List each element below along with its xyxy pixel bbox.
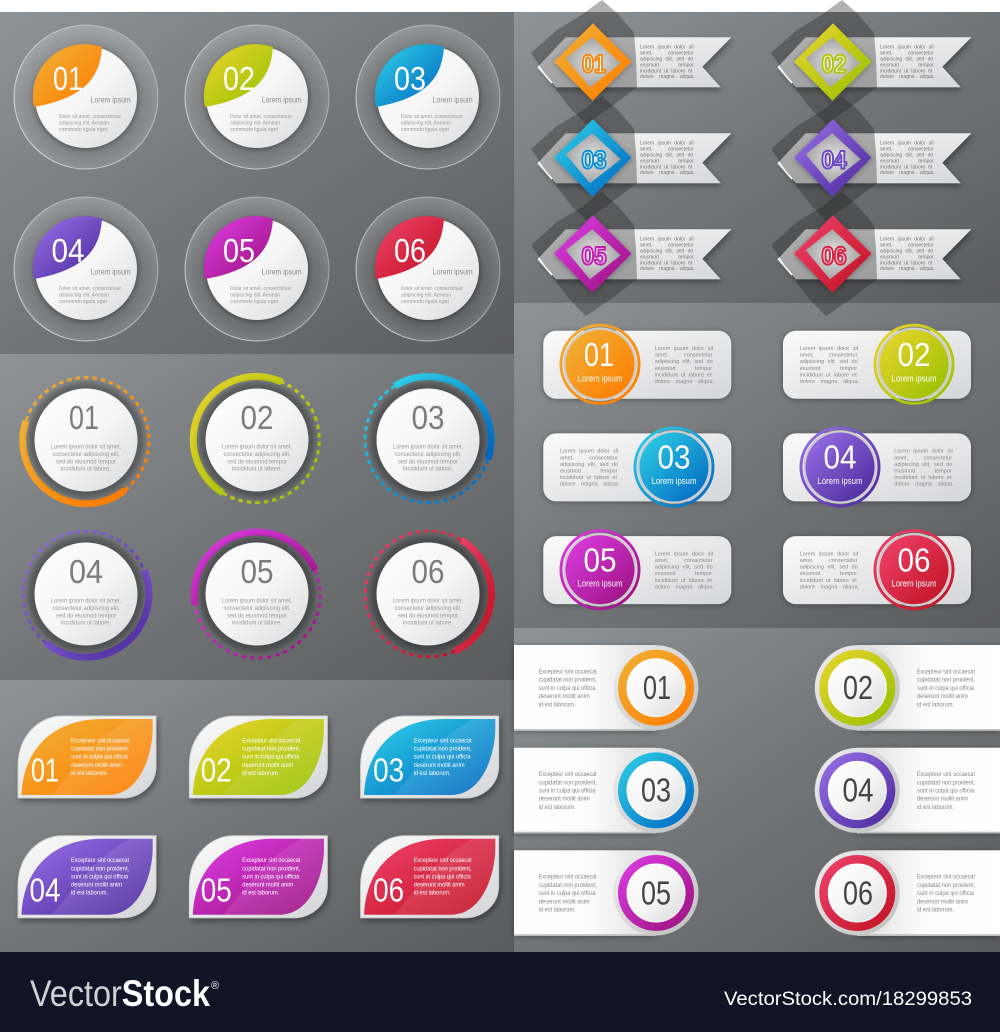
strip 03: cupidatat non proident,: [539, 779, 597, 786]
ribbon 06: dolore magna aliqua.: [880, 266, 935, 272]
panel: diamond ribbons: [514, 0, 1000, 316]
card 02: Lorem ipsum: [262, 95, 302, 105]
ribbon 04: adipiscing elit, sed do: [880, 152, 933, 158]
badge 04: 04: [30, 871, 60, 908]
footer bar: [0, 952, 1000, 1032]
strip 06: 06: [843, 874, 873, 911]
card 03: Dolor sit amet, consectetuer: [401, 114, 463, 120]
box 03: dolore magna aliqua.: [560, 482, 620, 488]
badge 03: Excepteur sint occaecat: [414, 737, 472, 744]
card 02: commodo ligula eget: [230, 127, 278, 133]
box 06: Lorem ipsum dolor sit: [800, 551, 859, 557]
ribbon 03: adipiscing elit, sed do: [640, 152, 693, 158]
card 05: adipiscing elit. Aenean: [230, 293, 280, 299]
card 05: Lorem ipsum: [262, 267, 302, 277]
card 06: [356, 197, 500, 341]
card 03: [356, 25, 500, 169]
strip 01: id est laborum.: [539, 701, 576, 708]
ribbon 04: dolore magna aliqua.: [880, 170, 935, 176]
badge 04: cupidatat non proident,: [71, 865, 129, 872]
strip 02: 02: [843, 669, 873, 706]
box 06: eiusmod tempor: [800, 571, 857, 577]
ring card 05: Lorem ipsum dolor sit amet,: [222, 598, 292, 605]
badge 03: [361, 716, 499, 798]
ribbon 01: eiusmod tempor: [640, 62, 694, 68]
card 01: 01: [53, 60, 83, 97]
card 02: 02: [223, 60, 255, 97]
ribbon 01: amet, consectetur: [640, 51, 694, 57]
ribbon 04: 04: [822, 146, 847, 174]
box 02: incididunt ut labore et: [800, 372, 857, 378]
card 02: [185, 25, 329, 169]
badge 06: deserunt mollit anim: [414, 881, 465, 888]
ring card 02: 02: [240, 399, 274, 436]
strip 02: deserunt mollit anim: [917, 693, 968, 700]
panel: white strips with rings: [514, 628, 1000, 952]
panel: ring circles: [0, 354, 514, 680]
box 06: [783, 531, 971, 609]
strip 06: Excepteur sint occaecat: [917, 874, 975, 881]
card 05: Dolor sit amet, consectetuer: [230, 286, 292, 292]
strip 01: deserunt mollit anim: [539, 693, 590, 700]
box 04: incididunt ut labore et: [894, 475, 952, 481]
ribbon 05: incididunt ut labore et: [640, 260, 693, 266]
ring card 04: incididunt ut labore.: [61, 620, 111, 627]
box 05: Lorem ipsum dolor sit: [655, 551, 714, 557]
strip 06: deserunt mollit anim: [917, 898, 968, 905]
box 03: amet, consectetur: [560, 455, 618, 461]
ring card 01: consectetur adipiscing elit,: [52, 451, 120, 458]
panel: leaf badges: [0, 680, 514, 952]
ribbon 02: incididunt ut labore et: [880, 68, 933, 74]
panel: rounded boxes with circles: [514, 303, 1000, 628]
box 06: dolore magna aliqua.: [800, 584, 860, 590]
box 02: 02: [898, 336, 930, 373]
strip 04: Excepteur sint occaecat: [917, 771, 975, 778]
box 02: dolore magna aliqua.: [800, 379, 860, 385]
ring card 06: incididunt ut labore.: [403, 620, 453, 627]
badge 05: deserunt mollit anim: [242, 881, 294, 888]
box 01: adipiscing elit, sed do: [655, 359, 713, 365]
ring card 05: 05: [240, 553, 274, 590]
badge 02: [189, 716, 327, 798]
ribbon 02: adipiscing elit, sed do: [880, 56, 933, 62]
badge 06: [361, 836, 499, 918]
strip 05: sunt in culpa qui officia: [539, 890, 596, 897]
ribbon 01: [531, 0, 731, 124]
box 04: 04: [824, 439, 856, 476]
card 01: [14, 25, 158, 169]
box 04: Lorem ipsum: [818, 476, 863, 487]
strip 03: sunt in culpa qui officia: [539, 788, 596, 795]
ring card 02: incididunt ut labore.: [232, 466, 282, 473]
box 03: incididunt ut labore et: [560, 475, 618, 481]
badge 04: Excepteur sint occaecat: [71, 857, 129, 864]
badge 06: Excepteur sint occaecat: [414, 857, 472, 864]
ring card 02: consectetur adipiscing elit,: [224, 451, 291, 458]
badge 02: sunt in culpa qui officia: [242, 754, 300, 761]
badge 06: cupidatat non proident,: [414, 865, 472, 872]
strip 05: Excepteur sint occaecat: [539, 874, 597, 881]
badge 03: 03: [373, 752, 404, 789]
strip 01: sunt in culpa qui officia: [539, 685, 596, 692]
card 04: commodo ligula eget: [59, 299, 107, 305]
strip 03: [514, 748, 698, 833]
ribbon 06: adipiscing elit, sed do: [880, 248, 933, 254]
box 02: eiusmod tempor: [800, 366, 857, 372]
box 01: dolore magna aliqua.: [655, 379, 715, 385]
badge 02: cupidatat non proident,: [242, 746, 300, 753]
ring card 04: sed do eiusmod tempor: [56, 612, 116, 620]
ring card 06: Lorem ipsum dolor sit amet,: [393, 598, 463, 605]
box 01: amet, consectetur: [655, 353, 713, 359]
box 01: [543, 325, 731, 403]
strip 02: cupidatat non proident,: [917, 677, 975, 684]
ribbon 04: incididunt ut labore et: [880, 164, 933, 170]
box 05: eiusmod tempor: [655, 571, 712, 577]
badge 01: cupidatat non proident,: [71, 746, 129, 753]
ribbon 03: 03: [582, 146, 606, 174]
footer logo: VectorStock: [30, 973, 210, 1014]
badge 01: Excepteur sint occaecat: [71, 737, 129, 744]
ring card 01: 01: [69, 399, 99, 436]
strip 01: [514, 645, 698, 731]
ribbon 02: amet, consectetur: [880, 51, 934, 57]
box 01: incididunt ut labore et: [655, 372, 712, 378]
registered mark: ®: [211, 980, 219, 992]
ribbon 04: Lorem ipsum dolor sit: [880, 141, 934, 147]
strip 05: cupidatat non proident,: [539, 882, 597, 889]
ring card 02: Lorem ipsum dolor sit amet,: [222, 444, 292, 451]
card 04: [14, 197, 158, 341]
ring card 01: Lorem ipsum dolor sit amet,: [51, 444, 121, 451]
ribbon 02: Lorem ipsum dolor sit: [880, 45, 934, 51]
box 05: Lorem ipsum: [578, 579, 623, 590]
ribbon 06: 06: [822, 242, 846, 270]
card 05: [185, 197, 329, 341]
badge 04: deserunt mollit anim: [71, 881, 122, 888]
box 05: incididunt ut labore et: [655, 578, 712, 584]
card 06: adipiscing elit. Aenean: [401, 293, 451, 299]
badge 02: id est laborum.: [242, 770, 279, 777]
badge 03: cupidatat non proident,: [414, 746, 472, 753]
strip 06: id est laborum.: [917, 907, 954, 914]
strip 03: 03: [641, 772, 671, 809]
card 06: commodo ligula eget: [401, 299, 449, 305]
strip 05: deserunt mollit anim: [539, 898, 590, 905]
ring card 01: sed do eiusmod tempor: [56, 458, 116, 466]
box 04: eiusmod tempor: [894, 468, 952, 474]
ring card 03: consectetur adipiscing elit,: [394, 451, 462, 458]
ring card 03: sed do eiusmod tempor: [398, 458, 458, 466]
card 01: adipiscing elit. Aenean: [59, 121, 109, 127]
ribbon 02: [771, 0, 971, 124]
ribbon 01: 01: [582, 50, 606, 78]
ribbon 03: incididunt ut labore et: [640, 164, 693, 170]
ring card 04: [23, 531, 149, 657]
box 04: dolore magna aliqua.: [894, 482, 954, 488]
ribbon 02: eiusmod tempor: [880, 62, 934, 68]
badge 04: sunt in culpa qui officia: [71, 873, 128, 880]
card 05: commodo ligula eget: [230, 299, 278, 305]
box 03: eiusmod tempor: [560, 468, 618, 474]
card 06: 06: [394, 232, 426, 269]
box 01: Lorem ipsum dolor sit: [655, 346, 714, 352]
ring card 06: consectetur adipiscing elit,: [394, 605, 462, 612]
card 04: Dolor sit amet, consectetuer: [59, 286, 121, 292]
strip 04: 04: [842, 772, 874, 809]
ring card 02: [193, 377, 319, 503]
ribbon 04: amet, consectetur: [880, 147, 934, 153]
ribbon 06: [771, 192, 971, 316]
badge 03: sunt in culpa qui officia: [414, 754, 471, 761]
ring card 05: [194, 532, 320, 658]
badge 05: [189, 836, 327, 918]
card 04: 04: [52, 232, 84, 269]
card 02: Dolor sit amet, consectetuer: [230, 114, 292, 120]
strip 03: Excepteur sint occaecat: [539, 771, 597, 778]
strip 02: id est laborum.: [917, 701, 954, 708]
box 04: adipiscing elit, sed do: [894, 462, 952, 468]
strip 03: id est laborum.: [539, 804, 576, 811]
box 06: amet, consectetur: [800, 558, 858, 564]
footer url: VectorStock.com/18299853: [724, 989, 972, 1010]
ring card 01: [23, 378, 149, 504]
ribbon 01: adipiscing elit, sed do: [640, 56, 693, 62]
card 03: adipiscing elit. Aenean: [401, 121, 451, 127]
ring card 04: 04: [69, 553, 103, 590]
badge 03: id est laborum.: [414, 770, 451, 777]
strip 01: cupidatat non proident,: [539, 677, 597, 684]
badge 05: id est laborum.: [242, 890, 279, 897]
box 02: [783, 325, 971, 403]
ribbon 03: eiusmod tempor: [640, 158, 694, 164]
ribbon 06: incididunt ut labore et: [880, 260, 933, 266]
badge 01: [18, 716, 156, 798]
badge 06: 06: [373, 871, 404, 908]
strip 03: deserunt mollit anim: [539, 796, 590, 803]
badge 01: deserunt mollit anim: [71, 762, 122, 769]
box 01: eiusmod tempor: [655, 366, 712, 372]
panel: glass circles: [0, 12, 514, 354]
card 05: 05: [223, 232, 255, 269]
card 01: Lorem ipsum: [91, 95, 131, 105]
strip 06: cupidatat non proident,: [917, 882, 975, 889]
ribbon 01: incididunt ut labore et: [640, 68, 693, 74]
strip 01: 01: [643, 669, 671, 706]
card 01: commodo ligula eget: [59, 127, 107, 133]
ribbon 05: Lorem ipsum dolor sit: [640, 237, 694, 243]
ring card 06: 06: [412, 553, 444, 590]
ribbon 06: eiusmod tempor: [880, 254, 934, 260]
ribbon 05: [531, 192, 731, 316]
box 02: Lorem ipsum: [892, 373, 937, 384]
card 03: Lorem ipsum: [433, 95, 473, 105]
badge 06: sunt in culpa qui officia: [414, 873, 471, 880]
ribbon 02: 02: [822, 50, 846, 78]
strip 06: sunt in culpa qui officia: [917, 890, 974, 897]
strip 01: Excepteur sint occaecat: [539, 668, 597, 675]
ring card 02: sed do eiusmod tempor: [227, 458, 287, 466]
strip 05: id est laborum.: [539, 907, 576, 914]
badge 02: Excepteur sint occaecat: [242, 737, 300, 744]
ring card 06: [365, 531, 491, 657]
ribbon 06: Lorem ipsum dolor sit: [880, 237, 934, 243]
ring card 03: 03: [412, 399, 444, 436]
ring card 03: Lorem ipsum dolor sit amet,: [393, 444, 463, 451]
strip 02: [815, 645, 1000, 731]
ribbon 05: eiusmod tempor: [640, 254, 694, 260]
ribbon 03: [531, 96, 731, 220]
box 03: Lorem ipsum dolor sit: [560, 449, 619, 455]
strip 04: [815, 748, 1000, 833]
ring card 05: sed do eiusmod tempor: [227, 612, 287, 620]
strip 06: [815, 850, 1000, 936]
box 02: adipiscing elit, sed do: [800, 359, 858, 365]
card 02: adipiscing elit. Aenean: [230, 121, 280, 127]
ring card 05: consectetur adipiscing elit,: [224, 605, 291, 612]
box 03: [543, 428, 731, 506]
badge 04: [18, 836, 156, 918]
ring card 06: sed do eiusmod tempor: [398, 612, 458, 620]
ring card 04: consectetur adipiscing elit,: [52, 605, 120, 612]
box 01: Lorem ipsum: [578, 373, 623, 384]
box 06: incididunt ut labore et: [800, 578, 857, 584]
ring card 03: [365, 377, 491, 503]
ribbon 04: [771, 96, 971, 220]
card 04: Lorem ipsum: [91, 267, 131, 277]
box 05: amet, consectetur: [655, 558, 713, 564]
ring card 05: incididunt ut labore.: [232, 620, 282, 627]
box 05: dolore magna aliqua.: [655, 584, 715, 590]
box 01: 01: [584, 336, 614, 373]
badge 04: id est laborum.: [71, 890, 108, 897]
badge 05: 05: [201, 871, 232, 908]
ribbon 01: Lorem ipsum dolor sit: [640, 45, 694, 51]
badge 01: id est laborum.: [71, 770, 108, 777]
ribbon 04: eiusmod tempor: [880, 158, 934, 164]
strip 02: sunt in culpa qui officia: [917, 685, 974, 692]
ribbon 06: amet, consectetur: [880, 243, 934, 249]
box 03: adipiscing elit, sed do: [560, 462, 618, 468]
box 03: Lorem ipsum: [652, 476, 697, 487]
ribbon 05: dolore magna aliqua.: [640, 266, 695, 272]
box 05: adipiscing elit, sed do: [655, 565, 713, 571]
ribbon 05: 05: [582, 242, 607, 270]
card 04: adipiscing elit. Aenean: [59, 293, 109, 299]
strip 04: sunt in culpa qui officia: [917, 788, 974, 795]
badge 05: Excepteur sint occaecat: [242, 857, 300, 864]
ribbon 03: dolore magna aliqua.: [640, 170, 695, 176]
card 06: Lorem ipsum: [433, 267, 473, 277]
strip 04: id est laborum.: [917, 804, 954, 811]
card 03: commodo ligula eget: [401, 127, 449, 133]
strip 05: [514, 850, 698, 936]
ring card 01: incididunt ut labore.: [61, 466, 111, 473]
ribbon 03: amet, consectetur: [640, 147, 694, 153]
badge 01: 01: [31, 752, 59, 789]
box 06: Lorem ipsum: [892, 579, 937, 590]
strip 02: Excepteur sint occaecat: [917, 668, 975, 675]
ribbon 01: dolore magna aliqua.: [640, 74, 695, 80]
badge 05: sunt in culpa qui officia: [242, 873, 300, 880]
badge 01: sunt in culpa qui officia: [71, 754, 128, 761]
box 04: amet, consectetur: [894, 455, 952, 461]
box 04: Lorem ipsum dolor sit: [894, 449, 953, 455]
box 04: [783, 428, 971, 506]
box 06: adipiscing elit, sed do: [800, 565, 858, 571]
ribbon 05: adipiscing elit, sed do: [640, 248, 693, 254]
card 06: Dolor sit amet, consectetuer: [401, 286, 463, 292]
badge 05: cupidatat non proident,: [242, 865, 300, 872]
box 05: 05: [584, 541, 616, 578]
box 06: 06: [898, 541, 930, 578]
badge 02: 02: [201, 752, 232, 789]
box 03: 03: [658, 439, 690, 476]
box 05: [543, 531, 731, 609]
box 02: Lorem ipsum dolor sit: [800, 346, 859, 352]
box 02: amet, consectetur: [800, 353, 858, 359]
badge 06: id est laborum.: [414, 890, 451, 897]
strip 04: deserunt mollit anim: [917, 796, 968, 803]
strip 05: 05: [641, 874, 671, 911]
card 01: Dolor sit amet, consectetuer: [59, 114, 121, 120]
ribbon 05: amet, consectetur: [640, 243, 694, 249]
ribbon 02: dolore magna aliqua.: [880, 74, 935, 80]
badge 02: deserunt mollit anim: [242, 762, 294, 769]
card 03: 03: [394, 60, 426, 97]
badge 03: deserunt mollit anim: [414, 762, 465, 769]
ring card 03: incididunt ut labore.: [403, 466, 453, 473]
ribbon 03: Lorem ipsum dolor sit: [640, 141, 694, 147]
strip 04: cupidatat non proident,: [917, 779, 975, 786]
ring card 04: Lorem ipsum dolor sit amet,: [51, 598, 121, 605]
